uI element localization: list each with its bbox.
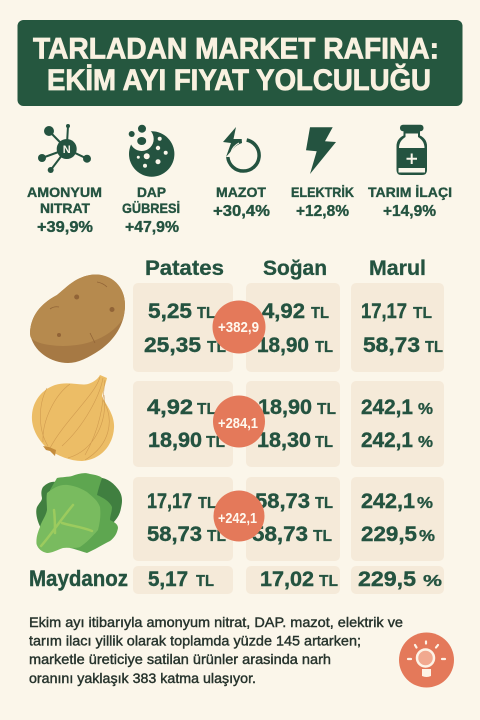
title banner — [18, 20, 462, 106]
column heading: Patates: Patates — [145, 257, 224, 280]
summary text: marketle üreticiye satilan ürünler arasinda narh — [29, 651, 331, 667]
row 2 values: 18,90 — [258, 396, 312, 419]
row 3 values: TL — [313, 528, 332, 545]
row 4 values — [148, 568, 442, 591]
row 1 values: TL — [311, 305, 329, 322]
row 2 values: % — [418, 434, 433, 451]
row 2 values: 18,30 — [257, 429, 311, 452]
row 1 values: 25,35 — [144, 334, 201, 357]
summary text — [29, 614, 403, 686]
icon: bottle — [396, 125, 427, 175]
input: pesticide: TARIM İLAÇI — [368, 184, 452, 200]
input: DAP fertilizer — [122, 125, 180, 236]
row 4 values: 229,5 — [358, 568, 416, 591]
title banner: EKİM AYI FIYAT YOLCULUĞU — [47, 63, 431, 97]
row 3 values: 229,5 — [361, 523, 417, 546]
row 1 values — [144, 300, 443, 357]
row 3 values: TL — [315, 495, 333, 512]
row 1 values: TL — [197, 305, 215, 322]
input: ammonium nitrate: +39,9% — [37, 219, 93, 236]
input: diesel: +30,4% — [213, 203, 270, 220]
badge: +382,9: +382,9 — [218, 319, 259, 336]
input: diesel — [213, 127, 270, 220]
icon: lightning bolt — [306, 127, 336, 174]
row 3 values — [147, 490, 435, 546]
row 2 values: TL — [206, 434, 225, 451]
column heading: Marul: Marul — [369, 257, 426, 280]
input: DAP fertilizer: +47,9% — [125, 219, 179, 236]
row 1 values: TL — [425, 339, 443, 356]
input: pesticide — [368, 125, 452, 220]
input: pesticide: +14,9% — [383, 203, 436, 220]
row 2 values: TL — [317, 401, 336, 418]
row 4 values: 17,02 — [260, 568, 314, 591]
row 1 values: 58,73 — [363, 334, 420, 357]
summary text: tarım ilacı yillik olarak toplamda yüzde 145 artarken; — [29, 632, 361, 648]
row 3 values: TL — [198, 495, 216, 512]
row 1 values: 18,90 — [257, 334, 309, 357]
row 1 values: TL — [413, 305, 432, 322]
icon: onion — [32, 375, 114, 461]
price table cells — [133, 283, 444, 594]
row 3 values: 58,73 — [252, 523, 308, 546]
column heading: Soğan: Soğan — [263, 257, 327, 280]
row 4 values: TL — [319, 573, 338, 590]
row 1 values: TL — [207, 339, 226, 356]
icon: light bulb — [399, 632, 454, 688]
input: electricity — [291, 127, 354, 220]
row 4 values: 5,17 — [148, 568, 188, 591]
badge: +242,1 — [214, 490, 264, 542]
badge: +284,1 — [213, 396, 265, 448]
row 3 values: 58,73 — [255, 490, 310, 513]
row 2 values: % — [418, 401, 433, 418]
row 1 values: 4,92 — [262, 300, 305, 323]
row 2 values: 18,90 — [148, 429, 202, 452]
row 1 values: 17,17 — [361, 300, 407, 323]
badge: +382,9 — [212, 300, 266, 354]
summary text: Ekim ayı itibarıyla amonyum nitrat, DAP. mazot, elektrik ve — [29, 614, 403, 630]
summary text: oranını yaklaşık 383 katma ulaşıyor. — [29, 670, 256, 686]
title banner: TARLADAN MARKET RAFINA: — [33, 32, 439, 66]
row 3 values: % — [417, 495, 433, 512]
icon: molecule: N — [63, 144, 71, 156]
icon: potato — [30, 275, 125, 363]
row 3 values: TL — [207, 528, 226, 545]
input: DAP fertilizer: GÜBRESİ — [122, 200, 180, 216]
row 4 values: TL — [196, 573, 214, 590]
row 2 values: TL — [315, 434, 333, 451]
input: electricity: +12,8% — [296, 203, 349, 220]
row 2 values: 242,1 — [361, 396, 413, 419]
row 2 values — [147, 396, 433, 452]
row 2 values: TL — [197, 401, 216, 418]
row 3 values: 242,1 — [361, 490, 415, 513]
row 1 values: 5,25 — [148, 300, 192, 323]
row heading: Maydanoz: Maydanoz — [29, 566, 128, 591]
row 4 values: % — [423, 573, 442, 590]
input: ammonium nitrate: NITRAT — [40, 200, 90, 216]
row 1 values: TL — [315, 339, 333, 356]
icon: bolt and cycle — [223, 127, 259, 171]
badge: +284,1: +284,1 — [218, 415, 258, 432]
row 2 values: 4,92 — [147, 396, 193, 419]
row 3 values: 58,73 — [147, 523, 202, 546]
icon: fertilizer granules — [129, 125, 174, 177]
input: diesel: MAZOT — [216, 184, 266, 200]
row 3 values: 17,17 — [147, 490, 192, 513]
input: ammonium nitrate: AMONYUM — [27, 184, 102, 200]
badge: +242,1: +242,1 — [218, 510, 257, 527]
row 2 values: 242,1 — [361, 429, 413, 452]
input: DAP fertilizer: DAP — [137, 184, 166, 200]
input: electricity: ELEKTRİK — [291, 184, 354, 200]
row 3 values: % — [419, 528, 435, 545]
input: ammonium nitrate — [27, 124, 102, 236]
icon: lettuce — [36, 473, 122, 553]
